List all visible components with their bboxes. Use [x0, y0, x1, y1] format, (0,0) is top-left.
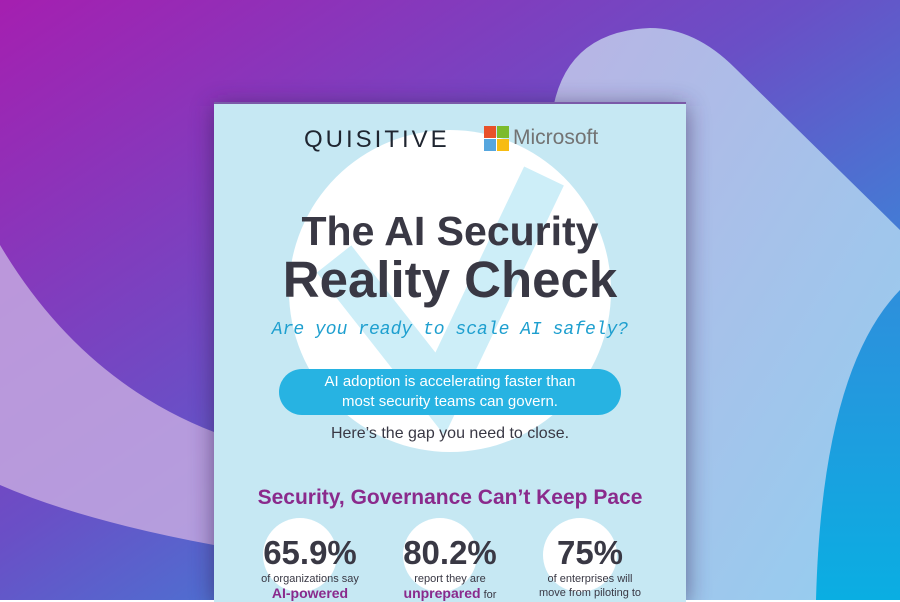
logo: microsoft	[484, 126, 598, 151]
text: gap: Here’s the gap you need to close.	[331, 425, 569, 442]
stat 2: unprepared for	[404, 585, 496, 601]
card	[214, 102, 686, 602]
stat 1	[261, 534, 359, 601]
callout pill: most security teams can govern.	[342, 393, 558, 410]
stat 3: move from piloting to	[539, 587, 641, 599]
watermark circle with checkmark	[263, 130, 617, 592]
callout pill: AI adoption is accelerating faster than	[324, 373, 576, 390]
logos	[304, 126, 598, 153]
stat 2: report they are	[414, 573, 486, 585]
stat 2: 80.2%	[403, 534, 497, 571]
subtitle: Are you ready to scale AI safely?	[272, 320, 628, 340]
stat 1: of organizations say	[261, 573, 359, 585]
title: Reality Check	[283, 251, 617, 308]
stat 3: 75%	[557, 534, 623, 571]
logo: quisitive: QUISITIVE	[304, 126, 450, 153]
callout pill	[279, 369, 621, 415]
stat 1: AI-powered	[272, 585, 348, 601]
logo: microsoft: Microsoft	[513, 126, 598, 149]
title	[283, 208, 618, 308]
stat 1: 65.9%	[263, 534, 357, 571]
heading: Security, Governance Can’t Keep Pace	[258, 486, 642, 509]
stat 3	[539, 534, 641, 599]
title: The AI Security	[302, 208, 598, 254]
stat 3: of enterprises will	[548, 573, 632, 585]
stat 2	[403, 534, 497, 601]
